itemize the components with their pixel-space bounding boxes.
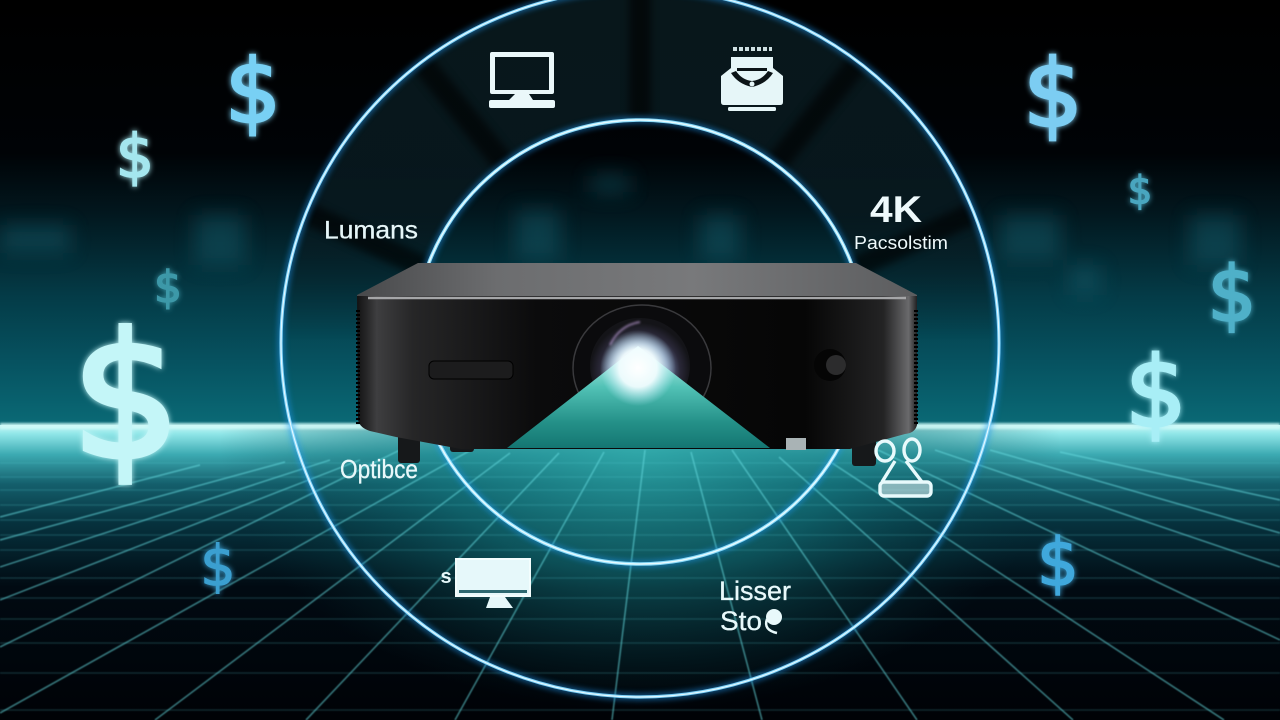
projector light beam bbox=[507, 346, 770, 448]
dollar signs floating left bbox=[71, 40, 281, 599]
dollar signs floating right: $ bbox=[1125, 336, 1187, 449]
background: dark sky with teal horizon bbox=[0, 0, 1280, 426]
projector right knob bbox=[814, 349, 846, 381]
label: Lisser Sto bbox=[719, 576, 791, 636]
label: 4K Resolution bbox=[854, 189, 948, 253]
label: Lumans: Lumans bbox=[324, 216, 418, 244]
perspective floor grid bbox=[0, 423, 1280, 720]
projector left slot bbox=[429, 361, 513, 379]
small bracket bbox=[786, 438, 806, 450]
inner glowing ring bbox=[414, 120, 866, 564]
label: Lisser Sto: Sto bbox=[720, 606, 762, 636]
dollar signs floating left: $ bbox=[154, 262, 182, 313]
label: 4K Resolution: 4K bbox=[870, 189, 922, 230]
dollar signs floating right: $ bbox=[1208, 251, 1256, 340]
dollar signs floating left: $ bbox=[71, 296, 181, 498]
projector feet bbox=[398, 430, 876, 466]
icon: monitor bbox=[489, 52, 555, 108]
projector front body bbox=[357, 296, 917, 449]
projector lens hot spot bbox=[600, 330, 676, 406]
icon: wide screen: s bbox=[440, 566, 452, 588]
panel: dark segmented band between rings bbox=[286, 0, 994, 316]
dollar signs floating left: $ bbox=[200, 534, 236, 599]
dollar signs floating right: $ bbox=[1037, 524, 1079, 601]
dollar signs floating left: $ bbox=[225, 40, 281, 143]
icon: people cluster bbox=[876, 439, 931, 496]
dollar signs floating left: $ bbox=[116, 122, 154, 192]
outer glowing ring bbox=[281, 0, 999, 697]
icon: projector document tray bbox=[721, 47, 783, 111]
icon: wide screen bbox=[440, 559, 530, 608]
dollar signs floating right: $ bbox=[1128, 169, 1152, 214]
label: Optibce: Optibce bbox=[340, 454, 418, 484]
projector lens bbox=[573, 305, 711, 431]
dollar signs floating right bbox=[1023, 40, 1256, 601]
label: Lisser Sto: Lisser bbox=[719, 576, 791, 606]
dollar signs floating right: $ bbox=[1023, 40, 1083, 149]
projector bbox=[357, 263, 917, 466]
projector top surface bbox=[357, 263, 917, 302]
label: 4K Resolution: Pacsolstim bbox=[854, 233, 948, 253]
